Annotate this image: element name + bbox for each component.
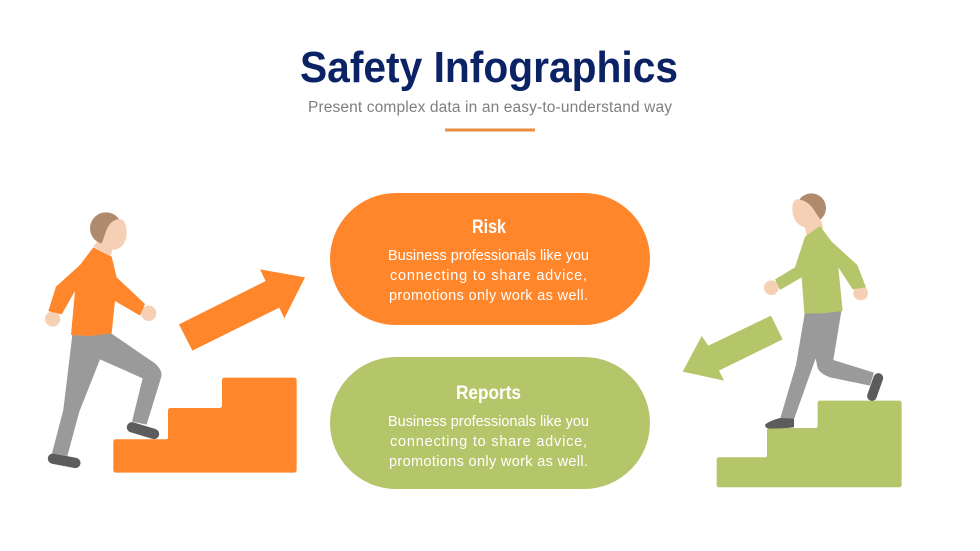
shoes bbox=[53, 427, 154, 463]
hands bbox=[764, 280, 779, 295]
panel: risk bbox=[330, 193, 650, 325]
neck bbox=[93, 237, 113, 256]
icon: orange arrow up bbox=[179, 269, 305, 351]
icon: orange stairs bbox=[113, 378, 297, 473]
title: Safety Infographics bbox=[300, 43, 678, 92]
figure: climbing person bbox=[45, 212, 162, 463]
panel: reports bbox=[330, 357, 650, 489]
risk body text: connecting to share advice, bbox=[390, 268, 587, 284]
face and neck bbox=[792, 199, 823, 236]
reports pill background bbox=[330, 357, 650, 489]
face bbox=[101, 219, 127, 250]
risk pill background bbox=[330, 193, 650, 325]
trousers bbox=[52, 333, 162, 456]
hair bbox=[90, 212, 122, 244]
reports heading: Reports bbox=[456, 383, 521, 404]
icon: green stairs bbox=[717, 401, 902, 487]
reports body text: promotions only work as well. bbox=[389, 454, 588, 470]
figure: descending person bbox=[764, 193, 878, 429]
reports body text bbox=[388, 414, 589, 470]
subtitle: Present complex data in an easy-to-understand way bbox=[308, 99, 672, 116]
risk body text: Business professionals like you bbox=[388, 248, 589, 264]
reports body text: Business professionals like you bbox=[388, 414, 589, 430]
trousers bbox=[780, 309, 874, 419]
hands bbox=[45, 311, 60, 327]
shirt bbox=[775, 226, 866, 313]
illustration: person descending green stairs bbox=[683, 193, 902, 487]
icon: green arrow down bbox=[683, 316, 783, 381]
hair bbox=[797, 193, 826, 223]
risk body text: promotions only work as well. bbox=[389, 288, 588, 304]
shirt bbox=[48, 247, 145, 336]
shoes bbox=[765, 418, 794, 429]
risk body text bbox=[388, 248, 589, 304]
reports body text: connecting to share advice, bbox=[390, 434, 587, 450]
title underline bbox=[445, 128, 535, 132]
illustration: person climbing orange stairs bbox=[45, 212, 305, 473]
risk heading: Risk bbox=[472, 217, 506, 238]
